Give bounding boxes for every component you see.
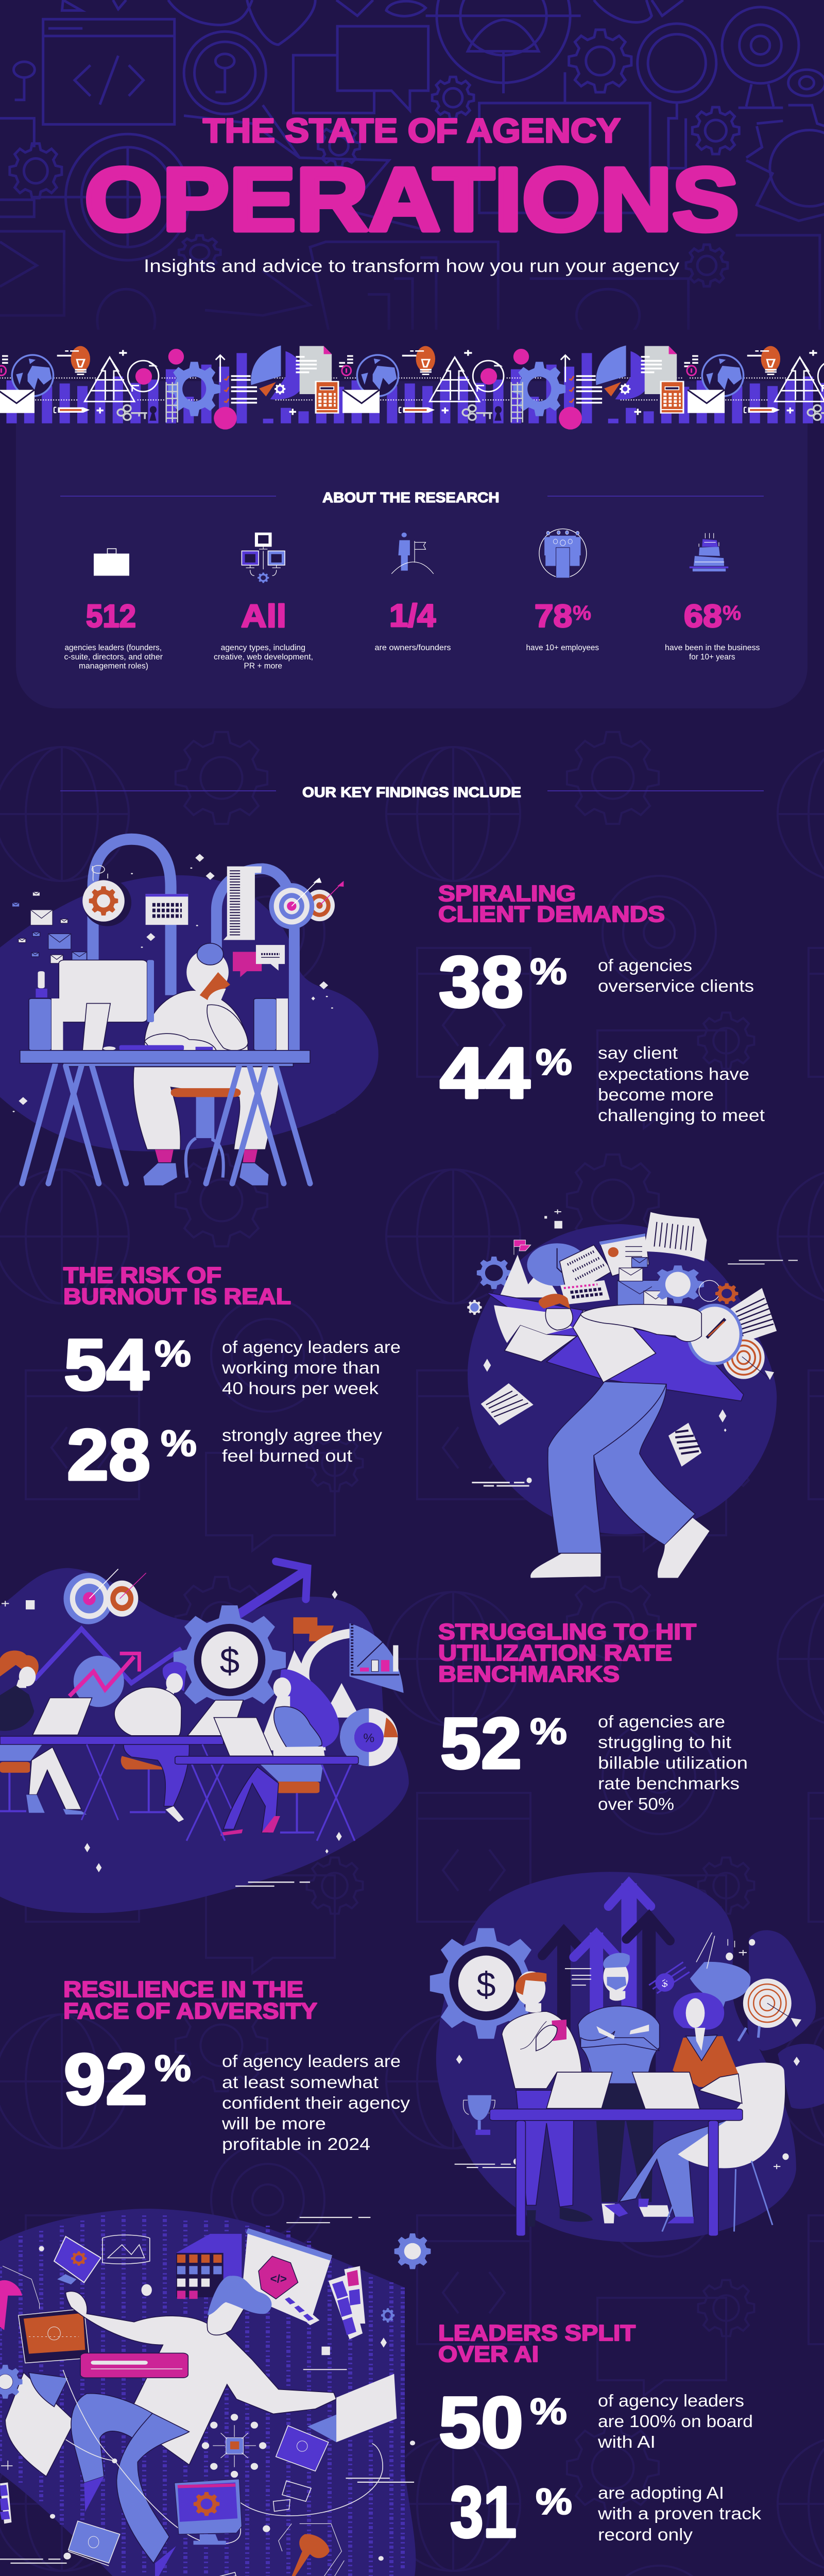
illustration: person juggling digital content and AI xyxy=(0,2209,431,2576)
stat: 28% xyxy=(67,1414,383,1495)
caption xyxy=(665,643,760,662)
caption: agency types, including xyxy=(221,643,305,652)
stat text: with a proven track xyxy=(597,2504,762,2523)
icon: networked screens xyxy=(242,533,285,583)
heading: leaders split over AI: OVER AI xyxy=(438,2342,539,2367)
stat: 38% xyxy=(439,941,754,1022)
illustration: person carrying overflowing work xyxy=(467,1210,798,1578)
title line 1: THE STATE OF AGENCY xyxy=(203,111,621,149)
illustration: team at desks with gear: % xyxy=(363,1732,374,1745)
caption: creative, web development, xyxy=(214,653,313,662)
heading: about the research: ABOUT THE RESEARCH xyxy=(322,489,500,505)
illustration: confident team at table xyxy=(430,1872,824,2242)
panel: about the research xyxy=(16,361,808,708)
stat: 1/4: 1/4 xyxy=(389,598,436,634)
stat text xyxy=(597,2483,762,2544)
caption: have 10+ employees xyxy=(526,643,599,652)
icon: birthday cake xyxy=(690,533,728,571)
stat: 28%: % xyxy=(161,1423,197,1464)
heading: leaders split over AI: LEADERS SPLIT xyxy=(438,2320,636,2346)
stat text: expectations have xyxy=(598,1064,749,1083)
caption: agencies leaders (founders, xyxy=(65,643,162,652)
illustration: team at desks with gear xyxy=(0,1562,409,1913)
stat text: are 100% on board xyxy=(598,2412,753,2431)
stat: 28%: 28 xyxy=(67,1414,150,1495)
stat text: billable utilization xyxy=(598,1753,748,1772)
caption: management roles) xyxy=(79,662,148,671)
stat: 52%: 52 xyxy=(440,1703,522,1784)
stat text: confident their agency xyxy=(222,2093,410,2112)
stat text: of agencies are xyxy=(598,1712,725,1731)
stat: 52% xyxy=(440,1703,748,1814)
heading: risk of burnout: BURNOUT IS REAL xyxy=(63,1284,291,1309)
caption: PR + more xyxy=(244,662,282,671)
stat: 78%: 78 xyxy=(535,599,572,634)
stat: 50%: 50 xyxy=(439,2382,523,2463)
illustration: confident team at table: $ xyxy=(476,1965,496,2004)
stat: 31% xyxy=(450,2471,762,2552)
stat text: record only xyxy=(598,2525,693,2544)
heading: key findings: OUR KEY FINDINGS INCLUDE xyxy=(302,784,521,800)
stat: 44%: % xyxy=(536,1042,572,1083)
stat text xyxy=(597,2391,753,2451)
caption: have been in the business xyxy=(665,643,760,652)
stat: 92% xyxy=(64,2039,410,2154)
subtitle: Insights and advice to transform how you run your agency xyxy=(144,256,680,276)
caption: c-suite, directors, and other xyxy=(64,653,163,662)
heading: leaders split over AI xyxy=(438,2320,636,2367)
stat text: say client xyxy=(598,1043,678,1062)
stat: 38%: 38 xyxy=(439,941,523,1022)
stat: all: All xyxy=(241,599,286,634)
icon: briefcase xyxy=(94,549,129,576)
stat: 38%: % xyxy=(530,952,567,992)
stat text: profitable in 2024 xyxy=(222,2134,370,2154)
stat: 92%: 92 xyxy=(64,2039,147,2120)
stat text xyxy=(221,1337,401,1398)
heading: resilience xyxy=(63,1977,317,2024)
heading: spiraling client demands: SPIRALING xyxy=(438,881,576,906)
stat text xyxy=(598,956,754,995)
stat: 512 xyxy=(64,599,163,671)
stat text: of agency leaders are xyxy=(222,2052,401,2071)
caption: are owners/founders xyxy=(375,643,451,652)
stat: 54%: 54 xyxy=(64,1324,149,1405)
stat: 68% xyxy=(665,599,760,662)
illustration: person juggling digital content and AI: </> xyxy=(270,2272,287,2285)
heading: resilience: RESILIENCE IN THE xyxy=(63,1977,303,2002)
stat: all xyxy=(214,599,313,671)
stat: 92%: % xyxy=(154,2048,191,2089)
stat text: are adopting AI xyxy=(598,2483,724,2502)
heading: spiraling client demands xyxy=(438,881,665,927)
stat: 68%: % xyxy=(723,602,741,624)
stat text xyxy=(598,1043,765,1125)
stat: 44% xyxy=(440,1032,765,1125)
heading: struggling to hit utilization rate benchmarks: UTILIZATION RATE xyxy=(438,1640,672,1666)
stat text: of agency leaders xyxy=(598,2391,744,2410)
stat: 44%: 44 xyxy=(440,1032,530,1113)
stat: 31%: % xyxy=(536,2482,572,2522)
caption xyxy=(214,643,313,671)
stat: 54%: % xyxy=(154,1334,191,1375)
icon: team group xyxy=(539,529,587,578)
decorative icon band xyxy=(0,346,824,430)
heading: spiraling client demands: CLIENT DEMANDS xyxy=(438,902,665,927)
heading: resilience: FACE OF ADVERSITY xyxy=(63,1998,317,2024)
heading: risk of burnout: THE RISK OF xyxy=(63,1263,221,1288)
title xyxy=(84,111,739,249)
stat text: become more xyxy=(598,1085,714,1104)
icon: person with flag xyxy=(391,533,434,574)
stat: 50% xyxy=(439,2382,753,2463)
stat text: with AI xyxy=(597,2432,656,2451)
stat: 1/4 xyxy=(375,598,451,652)
stat: 512: 512 xyxy=(86,599,136,634)
stat text xyxy=(221,2052,410,2154)
stat text xyxy=(222,1426,383,1465)
caption xyxy=(64,643,163,671)
stat text: working more than xyxy=(221,1358,380,1377)
caption: for 10+ years xyxy=(689,653,735,662)
heading: risk of burnout xyxy=(63,1263,291,1309)
stat text: overservice clients xyxy=(598,976,754,995)
stat text: over 50% xyxy=(598,1794,674,1814)
stat: 54% xyxy=(64,1324,401,1405)
stat text: feel burned out xyxy=(222,1446,352,1465)
heading: struggling to hit utilization rate benchmarks: STRUGGLING TO HIT xyxy=(438,1619,696,1645)
stat text: of agencies xyxy=(598,956,692,975)
stat text: of agency leaders are xyxy=(222,1337,401,1357)
stat text xyxy=(598,1712,748,1814)
illustration: confident team at table: $ xyxy=(662,1978,668,1990)
heading: struggling to hit utilization rate benchmarks: BENCHMARKS xyxy=(438,1662,620,1687)
illustration: overwhelmed person at desk xyxy=(0,839,379,1186)
stat text: will be more xyxy=(221,2114,326,2133)
stat text: challenging to meet xyxy=(598,1106,765,1125)
stat: 78% xyxy=(526,599,599,652)
stat text: strongly agree they xyxy=(222,1426,383,1445)
stat text: struggling to hit xyxy=(598,1733,731,1752)
stat text: 40 hours per week xyxy=(222,1379,379,1398)
stat text: at least somewhat xyxy=(222,2073,379,2092)
title line 2: OPERATIONS xyxy=(84,149,739,249)
stat text: rate benchmarks xyxy=(598,1774,740,1793)
stat: 50%: % xyxy=(530,2392,567,2432)
heading: struggling to hit utilization rate benchmarks xyxy=(438,1619,696,1687)
stat: 52%: % xyxy=(530,1711,567,1752)
stat: 68%: 68 xyxy=(684,599,722,634)
illustration: team at desks with gear: $ xyxy=(220,1641,239,1681)
stat: 31%: 31 xyxy=(450,2471,517,2552)
stat: 78%: % xyxy=(573,602,591,624)
